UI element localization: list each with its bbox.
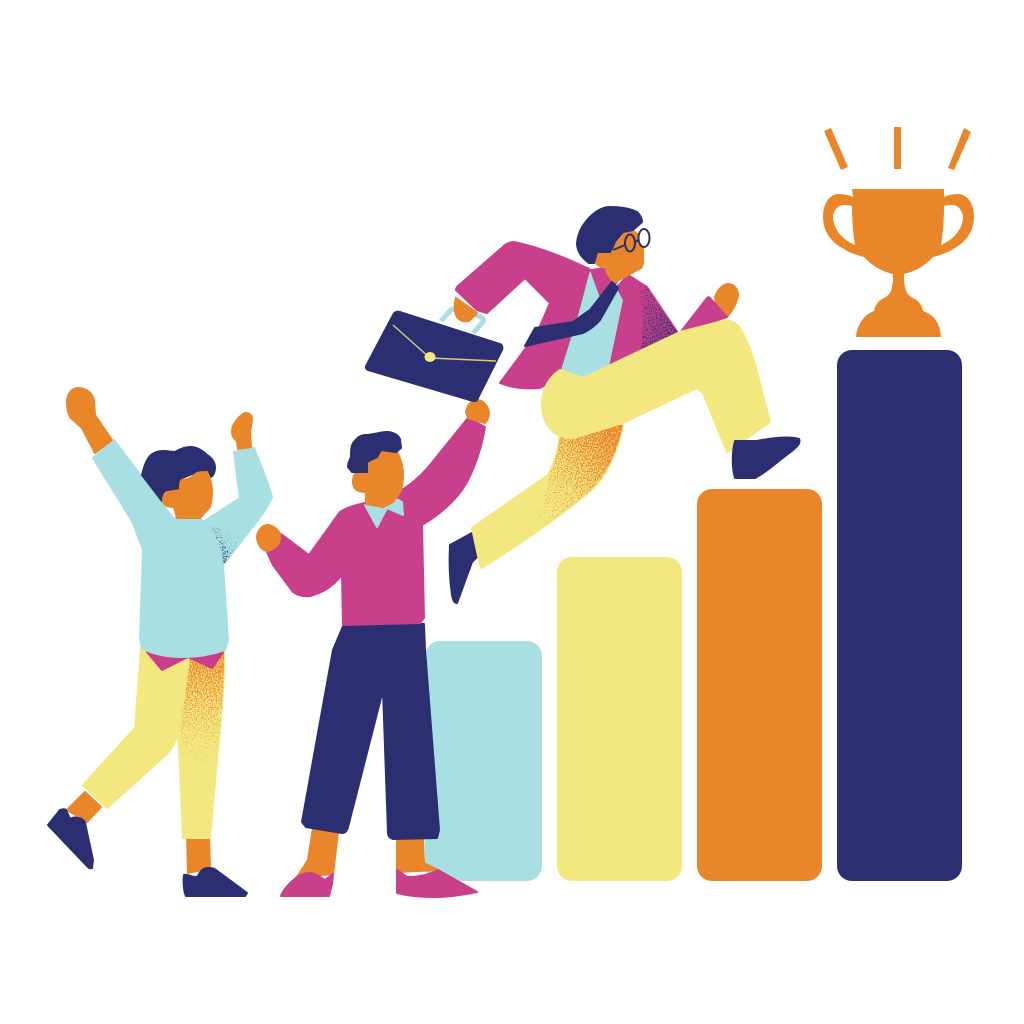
figure: middle man reaching up xyxy=(257,400,489,897)
trousers xyxy=(302,624,439,839)
briefcase handle xyxy=(441,309,483,333)
bar chart: four rising bars xyxy=(425,350,962,881)
hair xyxy=(142,447,215,501)
rear shoe xyxy=(48,809,93,868)
front ankle xyxy=(187,836,210,873)
front sleeve xyxy=(680,297,727,333)
figure: left man cheering xyxy=(48,388,272,896)
hair xyxy=(348,432,401,472)
collar xyxy=(365,497,403,527)
sweater shading xyxy=(210,525,243,565)
raised hand xyxy=(715,284,738,317)
briefcase strap and clasp xyxy=(393,325,496,361)
front shoe xyxy=(733,438,800,478)
icon: trophy with shine rays xyxy=(823,127,974,337)
hand left xyxy=(257,525,280,551)
rear ankle xyxy=(297,828,338,877)
front trousers xyxy=(542,320,770,452)
belt pocket xyxy=(147,652,223,670)
face xyxy=(595,231,643,282)
trouser shading xyxy=(180,652,224,768)
front shoe xyxy=(184,868,247,896)
hair xyxy=(577,207,642,263)
necktie xyxy=(525,282,618,346)
head xyxy=(163,472,212,518)
carrying hand xyxy=(455,298,477,321)
jacket shading xyxy=(638,283,678,353)
rear ankle xyxy=(67,792,101,822)
back leg xyxy=(472,425,623,568)
sweater xyxy=(93,440,272,657)
sweater xyxy=(267,418,485,625)
raised hand left xyxy=(67,388,112,453)
jacket collar xyxy=(591,268,617,295)
glasses xyxy=(613,229,650,252)
head xyxy=(353,450,403,507)
raised hand right xyxy=(232,413,252,449)
jacket and back sleeve xyxy=(456,242,589,388)
jacket right panel xyxy=(610,275,678,367)
rear shoe xyxy=(281,873,333,896)
front ankle xyxy=(397,836,438,872)
icon: briefcase xyxy=(365,311,503,402)
front shoe xyxy=(397,870,477,897)
hand right xyxy=(466,400,489,423)
back shoe xyxy=(450,533,477,603)
figure: leaping businessman with briefcase xyxy=(365,207,800,603)
back leg shading xyxy=(526,425,623,537)
shirt xyxy=(560,268,624,378)
trousers xyxy=(83,648,224,838)
